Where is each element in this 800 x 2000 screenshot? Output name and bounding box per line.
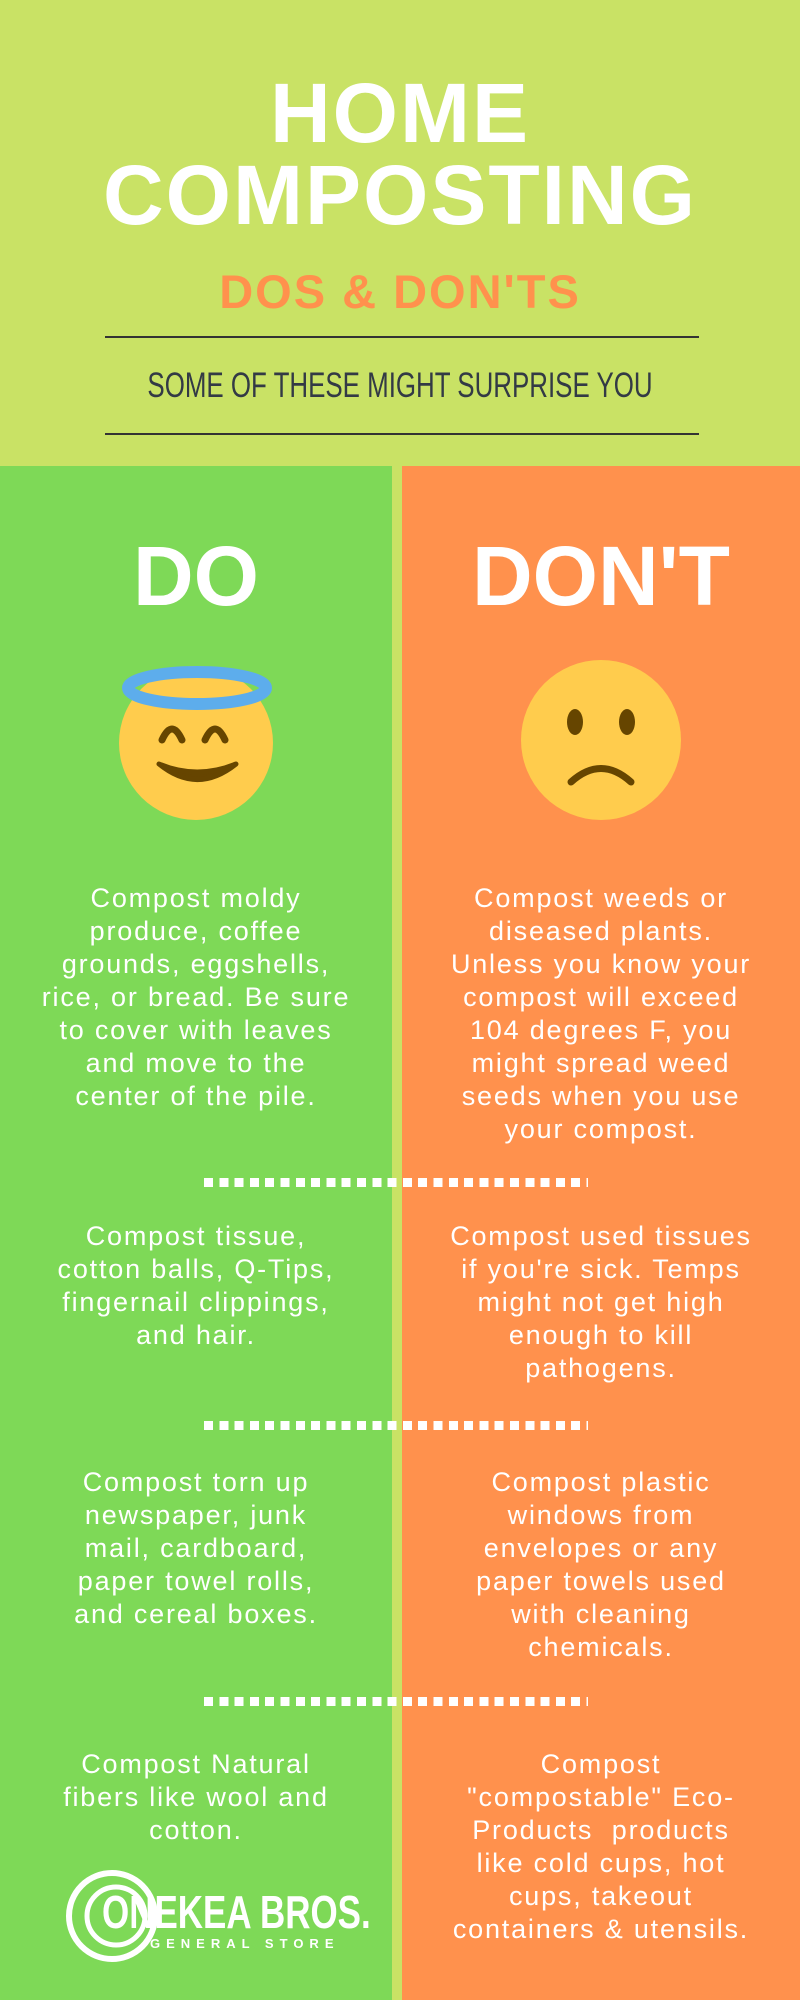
tagline: SOME OF THESE MIGHT SURPRISE YOU bbox=[147, 366, 653, 405]
text: don't 1: 104 degrees F, you bbox=[470, 1015, 732, 1045]
logo bbox=[66, 1870, 371, 1962]
text: do 1: grounds, eggshells, bbox=[62, 949, 330, 979]
text: do 2 bbox=[58, 1221, 334, 1350]
text: do 3: Compost torn up bbox=[83, 1467, 309, 1497]
text: don't 2: enough to kill bbox=[509, 1320, 693, 1350]
text: do 1: Compost moldy bbox=[91, 883, 301, 913]
text: do 1: and move to the bbox=[86, 1048, 306, 1078]
text: do 3: paper towel rolls, bbox=[78, 1566, 314, 1596]
subtitle: dos & don'ts: DOS & DON'TS bbox=[219, 265, 581, 318]
text: don't 2: might not get high bbox=[477, 1287, 725, 1317]
text: don't 2: if you're sick. Temps bbox=[461, 1254, 741, 1284]
text: don't 1: diseased plants. bbox=[489, 916, 713, 946]
text: do 1: to cover with leaves bbox=[59, 1015, 333, 1045]
text: don't 2 bbox=[450, 1221, 752, 1383]
text: don't 3: paper towels used bbox=[476, 1566, 726, 1596]
text: do 2: cotton balls, Q-Tips, bbox=[58, 1254, 334, 1284]
text: do 4: cotton. bbox=[149, 1815, 243, 1845]
text: don't 4: containers & utensils. bbox=[453, 1914, 749, 1944]
text: do 1: center of the pile. bbox=[75, 1081, 317, 1111]
text: don't 1: seeds when you use bbox=[462, 1081, 740, 1111]
text: do 1: produce, coffee bbox=[90, 916, 302, 946]
text: don't 1: Compost weeds or bbox=[474, 883, 728, 913]
logo: ONEKEA BROS. bbox=[102, 1886, 371, 1938]
title: HOME bbox=[270, 66, 530, 160]
text: do 4: Compost Natural bbox=[81, 1749, 311, 1779]
icon: frowning face bbox=[521, 660, 681, 820]
text: do 4 bbox=[63, 1749, 329, 1845]
text: don't 1: your compost. bbox=[505, 1114, 697, 1144]
text: don't 2: Compost used tissues bbox=[450, 1221, 752, 1251]
text: do 3 bbox=[74, 1467, 318, 1629]
text: don't 4: like cold cups, hot bbox=[477, 1848, 725, 1878]
text: do 2: fingernail clippings, bbox=[62, 1287, 330, 1317]
text: don't 3 bbox=[476, 1467, 726, 1662]
text: don't 1: might spread weed bbox=[472, 1048, 730, 1078]
title: COMPOSTING bbox=[103, 148, 697, 242]
logo: GENERAL STORE bbox=[150, 1936, 339, 1951]
heading: DON'T: DON'T bbox=[472, 529, 730, 623]
text: don't 3: Compost plastic bbox=[491, 1467, 711, 1497]
text: do 4: fibers like wool and bbox=[63, 1782, 329, 1812]
text: do 3: newspaper, junk bbox=[85, 1500, 307, 1530]
text: don't 3: envelopes or any bbox=[484, 1533, 718, 1563]
text: do 1: rice, or bread. Be sure bbox=[42, 982, 350, 1012]
text: don't 3: with cleaning bbox=[511, 1599, 691, 1629]
text: don't 1: compost will exceed bbox=[463, 982, 739, 1012]
panel: do column bbox=[0, 466, 392, 2000]
text: do 3: mail, cardboard, bbox=[85, 1533, 307, 1563]
title bbox=[103, 66, 697, 242]
text: do 2: Compost tissue, bbox=[86, 1221, 306, 1251]
text: don't 1: Unless you know your bbox=[451, 949, 751, 979]
text: do 1 bbox=[42, 883, 350, 1111]
text: don't 3: chemicals. bbox=[528, 1632, 674, 1662]
text: don't 4: cups, takeout bbox=[509, 1881, 693, 1911]
text: don't 1 bbox=[451, 883, 751, 1144]
text: do 3: and cereal boxes. bbox=[74, 1599, 318, 1629]
header panel bbox=[0, 0, 800, 466]
text: don't 3: windows from bbox=[508, 1500, 694, 1530]
text: don't 4 bbox=[453, 1749, 749, 1944]
text: don't 2: pathogens. bbox=[525, 1353, 677, 1383]
text: don't 4: Products products bbox=[472, 1815, 730, 1845]
text: don't 4: Compost bbox=[541, 1749, 661, 1779]
heading: DO: DO bbox=[133, 529, 259, 623]
text: don't 4: "compostable" Eco- bbox=[467, 1782, 735, 1812]
text: do 2: and hair. bbox=[136, 1320, 256, 1350]
icon: angel smile bbox=[119, 666, 273, 820]
